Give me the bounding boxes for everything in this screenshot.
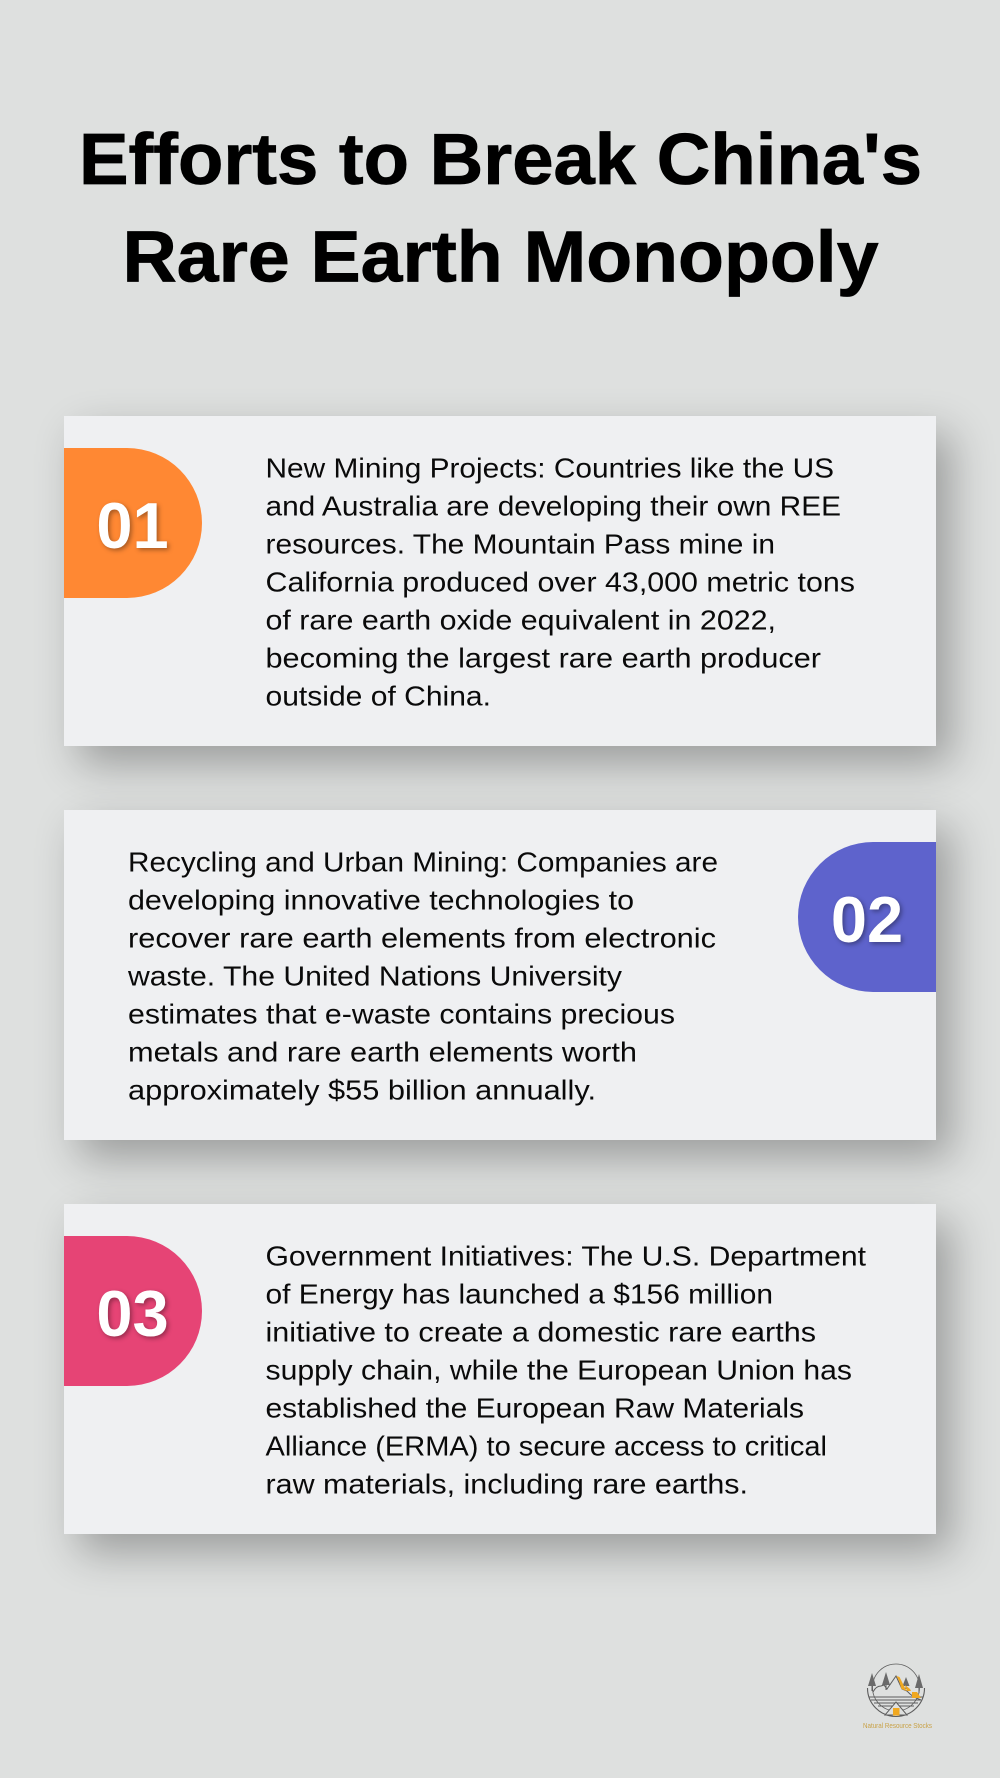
badge: 01: 01 xyxy=(96,489,169,562)
panel: recycling and urban mining xyxy=(64,810,936,1140)
text: government initiatives: of Energy has launched a $156 million xyxy=(266,1278,773,1310)
badge: 01 xyxy=(64,448,202,598)
text: government initiatives: initiative to create a domestic rare earths xyxy=(266,1316,816,1348)
title xyxy=(79,120,922,298)
text: recycling and urban mining: estimates that e-waste contains precious xyxy=(128,998,675,1030)
text: government initiatives: supply chain, while the European Union has xyxy=(266,1354,852,1386)
text: recycling and urban mining: metals and rare earth elements worth xyxy=(128,1036,637,1068)
text: new mining projects: and Australia are developing their own REE xyxy=(266,490,841,522)
title: Efforts to Break China's xyxy=(79,120,922,200)
text: recycling and urban mining: approximately $55 billion annually. xyxy=(128,1074,596,1106)
text: new mining projects: New Mining Projects: Countries like the US xyxy=(266,452,834,484)
text: government initiatives: raw materials, including rare earths. xyxy=(266,1468,748,1500)
text: government initiatives: Alliance (ERMA) to secure access to critical xyxy=(266,1430,827,1462)
text: recycling and urban mining: developing innovative technologies to xyxy=(128,884,634,916)
text: recycling and urban mining xyxy=(127,846,718,1106)
badge: 02 xyxy=(798,842,936,992)
badge: 03 xyxy=(64,1236,202,1386)
title: Rare Earth Monopoly xyxy=(122,218,878,298)
text: new mining projects: becoming the largest rare earth producer xyxy=(266,642,821,674)
badge: 03: 03 xyxy=(96,1277,169,1350)
text: recycling and urban mining: waste. The United Nations University xyxy=(127,960,622,992)
text: new mining projects: California produced over 43,000 metric tons xyxy=(266,566,855,598)
text: government initiatives: Government Initiatives: The U.S. Department xyxy=(266,1240,866,1272)
text: new mining projects: resources. The Mountain Pass mine in xyxy=(266,528,775,560)
text: recycling and urban mining: Recycling and Urban Mining: Companies are xyxy=(128,846,718,878)
text: government initiatives xyxy=(266,1240,866,1500)
text: recycling and urban mining: recover rare earth elements from electronic xyxy=(128,922,716,954)
icon: natural resource stocks logo xyxy=(863,1664,932,1730)
text: government initiatives: established the European Raw Materials xyxy=(266,1392,804,1424)
text: new mining projects: of rare earth oxide equivalent in 2022, xyxy=(266,604,776,636)
text: new mining projects xyxy=(266,452,855,712)
badge: 02: 02 xyxy=(831,883,903,956)
text: new mining projects: outside of China. xyxy=(266,680,491,712)
panel: government initiatives xyxy=(64,1204,936,1534)
panel: new mining projects xyxy=(64,416,936,746)
